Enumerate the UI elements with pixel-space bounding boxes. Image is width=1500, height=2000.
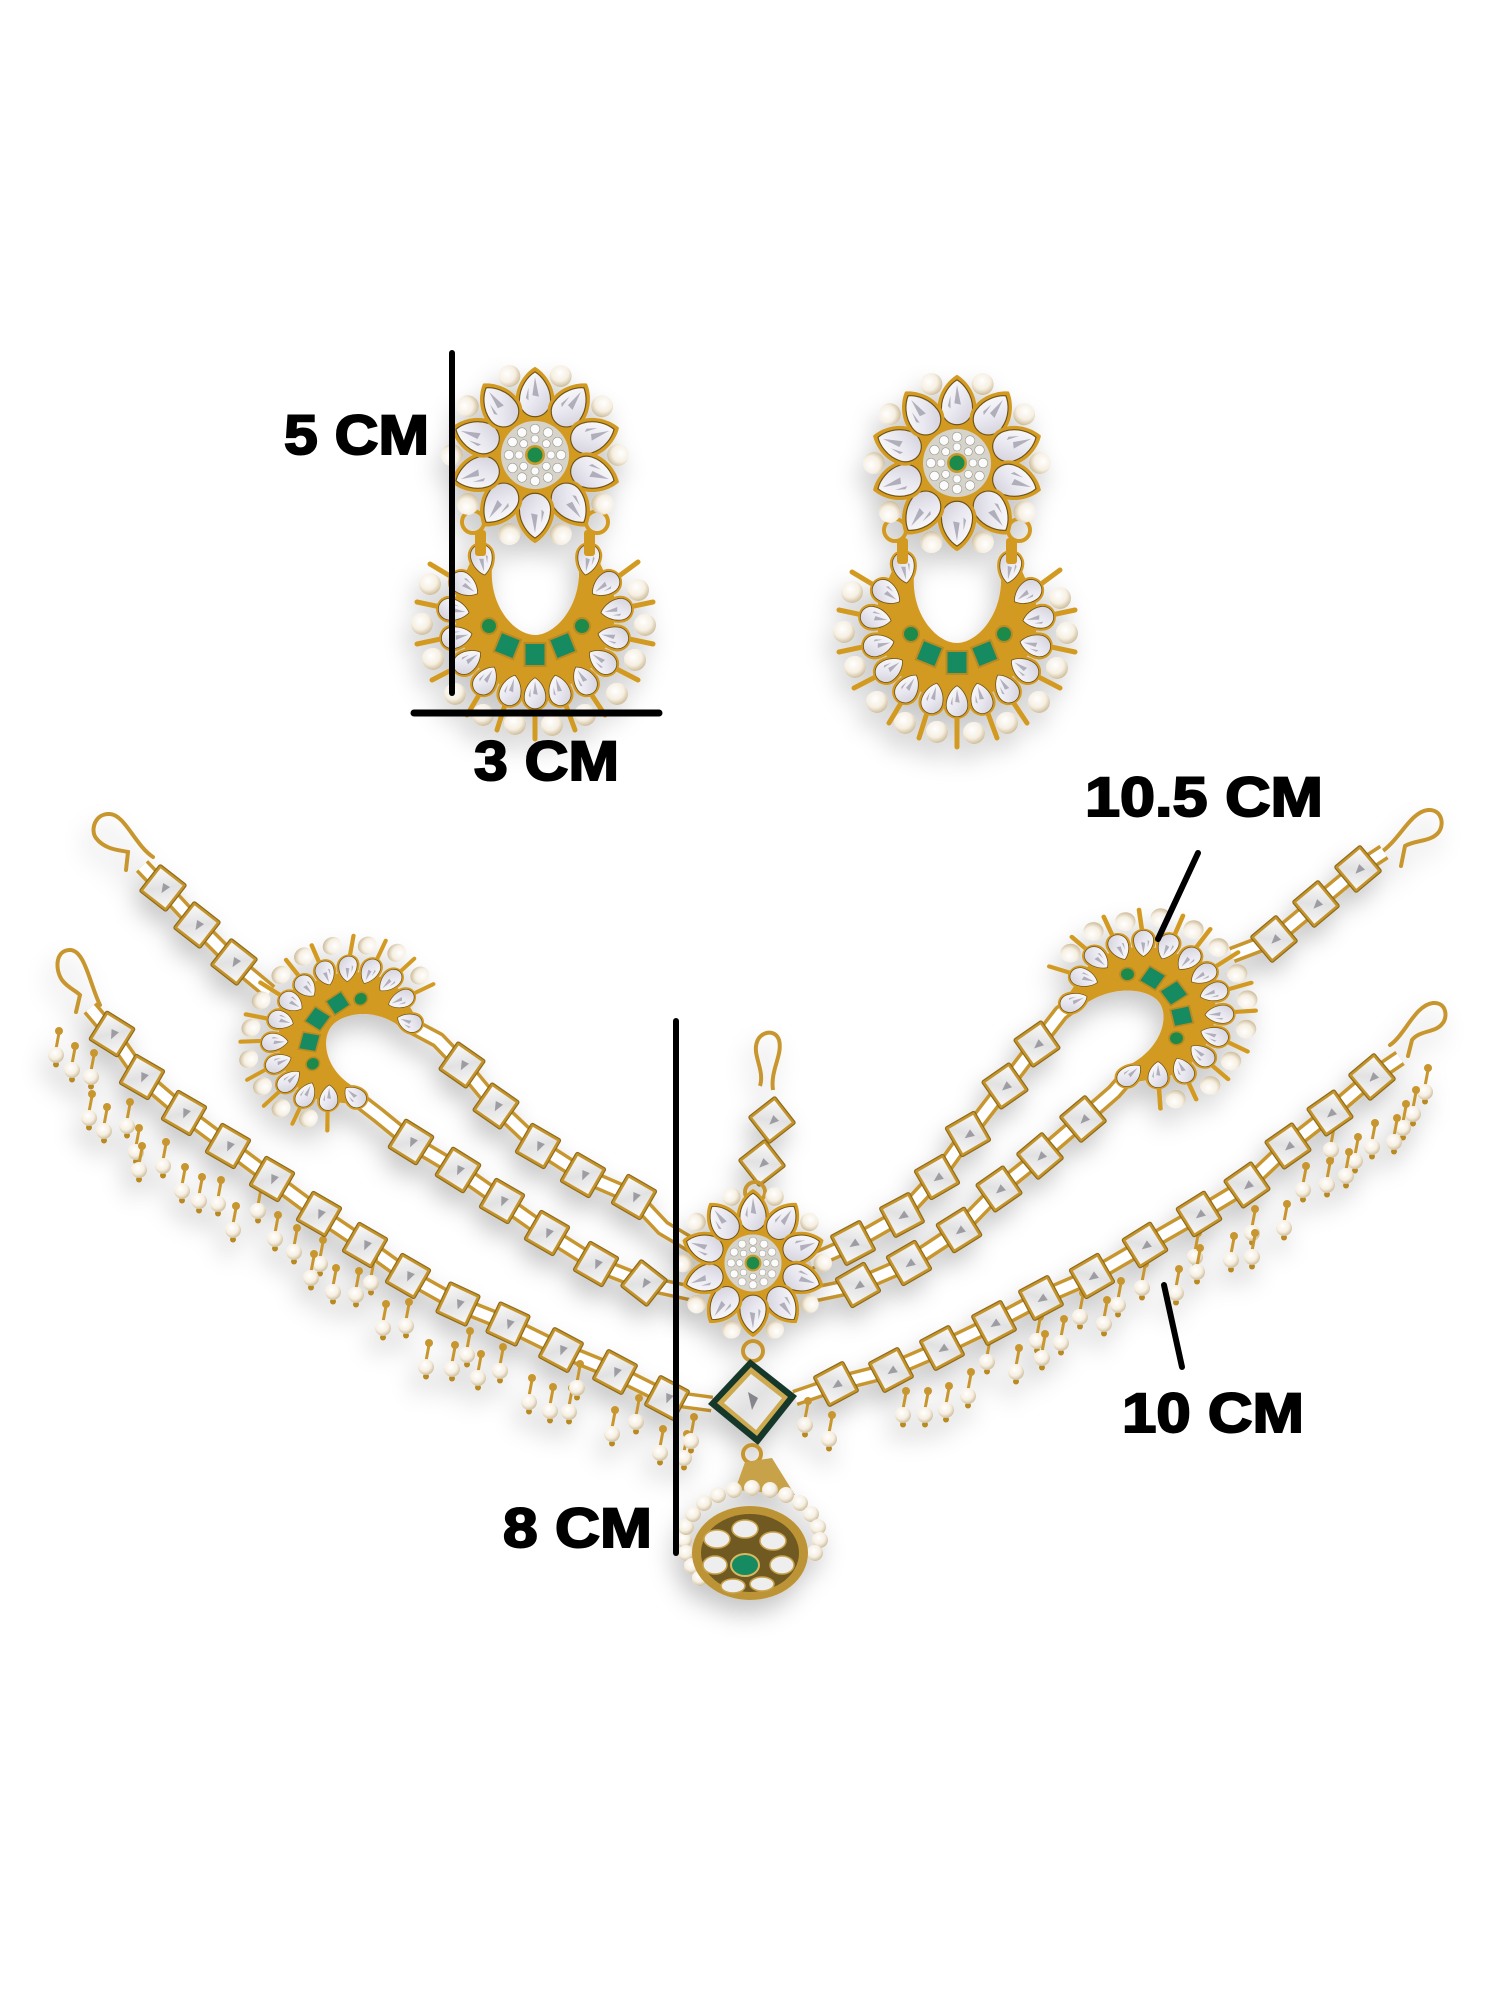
central flower	[674, 1185, 832, 1341]
crescent: left	[198, 896, 459, 1152]
link to pendant	[743, 1341, 763, 1361]
dimension line: earring width	[414, 710, 659, 716]
label: 8 CM: 8 CM	[503, 1496, 652, 1559]
head jewellery: side chains	[48, 810, 1445, 1470]
diamond links: left chains	[89, 864, 690, 1421]
chain links	[90, 852, 1400, 1404]
crescent: right	[1023, 869, 1303, 1133]
jhumka pendant	[676, 1445, 828, 1600]
green diamond	[708, 1359, 797, 1445]
label: 10.5 CM: 10.5 CM	[1085, 765, 1323, 828]
label: 3 CM: 3 CM	[474, 729, 619, 792]
dimension line: earring height	[449, 353, 455, 693]
tikka links	[738, 1096, 796, 1202]
dimension line: tikka length	[673, 1021, 679, 1553]
label: 5 CM: 5 CM	[284, 403, 429, 466]
earring: right	[833, 370, 1078, 747]
pearl drops	[48, 1027, 1433, 1470]
diamond links: right chains	[813, 845, 1396, 1407]
label: 10 CM: 10 CM	[1122, 1381, 1304, 1444]
pointer: 10 CM	[1164, 1285, 1182, 1367]
maang tikka: centre piece	[674, 1033, 832, 1600]
hooks	[57, 810, 1445, 1056]
pointer: 10.5 CM	[1158, 853, 1198, 939]
tikka hook	[756, 1033, 780, 1090]
earring: left	[411, 362, 656, 739]
